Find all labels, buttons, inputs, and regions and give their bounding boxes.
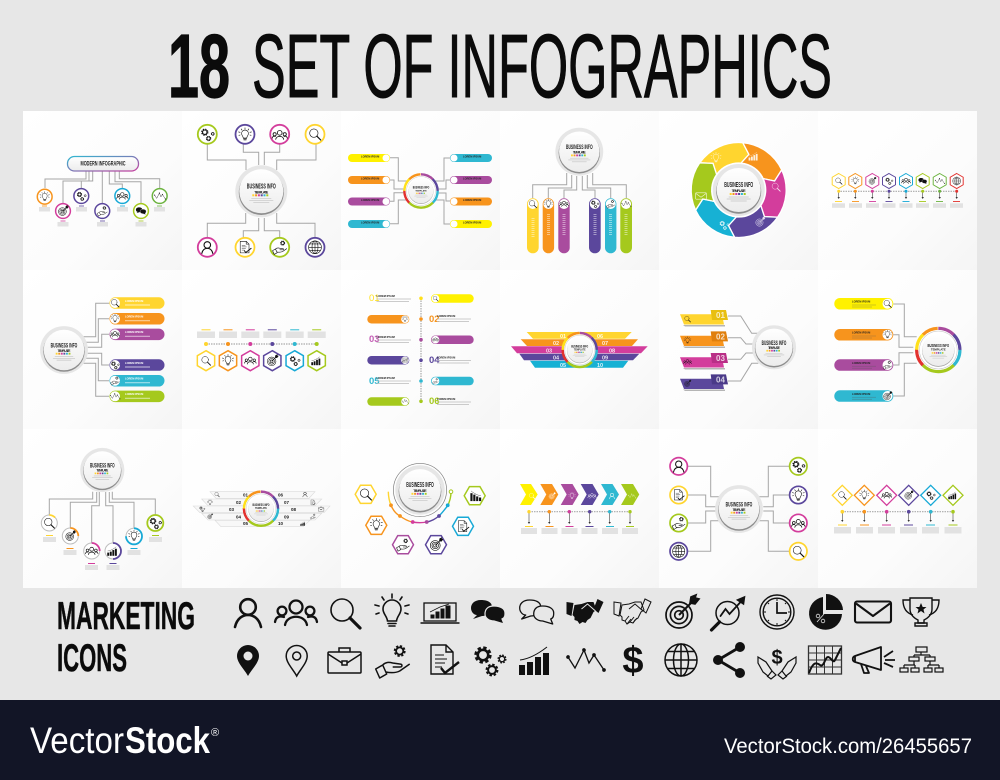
- center circle: BUSINESS INFO: [406, 482, 434, 489]
- panel 14: white layered ribbons with ring: 09: [284, 514, 290, 520]
- panel 3: ring with eight pills: LOREM IPSUM: [361, 198, 379, 202]
- panel 7: center left with six bars: LOREM IPSUM: [125, 315, 143, 319]
- panel backgrounds grid: [23, 111, 977, 588]
- panel 10: layered ribbons with ring: 04: [553, 355, 560, 361]
- panel 14: white layered ribbons with ring: 05: [243, 521, 249, 526]
- panel 9: vertical timeline: LOREM IPSUM: [437, 356, 455, 360]
- panel 3: ring with eight pills: LOREM IPSUM: [361, 220, 379, 224]
- center circle: TEMPLATE: [732, 189, 746, 193]
- panel 3: ring with eight pills: LOREM IPSUM: [463, 176, 481, 180]
- panel 14: white layered ribbons with ring: 03: [229, 507, 235, 512]
- center ring: TEMPLATE: [574, 348, 586, 351]
- panel 12: pills with ring right: LOREM IPSUM: [852, 361, 870, 365]
- panel 3: ring with eight pills: LOREM IPSUM: [463, 198, 481, 202]
- center ring: [563, 333, 597, 367]
- panel 14: white layered ribbons with ring: 07: [284, 500, 290, 505]
- panel 8: hexagon row: [197, 329, 326, 371]
- panel 9: vertical timeline: LOREM IPSUM: [376, 335, 395, 339]
- panel 3: ring with eight pills: LOREM IPSUM: [463, 154, 481, 158]
- center ring: [244, 492, 278, 526]
- panel 11: numbered ribbons: 01: [716, 311, 725, 320]
- panel 14: white layered ribbons with ring: 02: [236, 500, 242, 505]
- title: [168, 17, 832, 117]
- center circle: TEMPLATE: [96, 469, 109, 473]
- center circle: [715, 485, 763, 533]
- panel 10: layered ribbons with ring: 08: [609, 348, 615, 354]
- title: 18: [168, 17, 230, 117]
- panel 9: vertical timeline: 05: [369, 376, 380, 387]
- panel 14: white layered ribbons with ring: 08: [291, 507, 297, 512]
- panel 2: radial business info: [198, 125, 324, 257]
- colored arc: [388, 492, 451, 523]
- marketing icons heading: MARKETING: [57, 595, 195, 638]
- panel 16: chevrons timeline: [520, 484, 639, 534]
- footer logo: ®: [211, 727, 219, 739]
- center circle: TEMPLATE: [254, 190, 269, 194]
- segment green: [691, 163, 717, 210]
- center circle: TEMPLATE: [573, 151, 586, 155]
- panel 14: white layered ribbons with ring: 06: [278, 492, 284, 498]
- center ring: BUSINESS INFO: [253, 502, 269, 507]
- panel 1: modern infographic tree: [37, 156, 167, 226]
- panel 9: vertical timeline: LOREM IPSUM: [437, 397, 455, 401]
- panel 3: ring with eight pills: [348, 154, 492, 228]
- center circle: TEMPLATE: [413, 489, 427, 493]
- heading pill: MODERN INFOGRAPHIC: [80, 162, 126, 168]
- panel 18: diamond timeline: [832, 485, 963, 534]
- panel 12: pills with ring right: LOREM IPSUM: [852, 392, 870, 396]
- center ring: [917, 328, 960, 372]
- panel 3: ring with eight pills: LOREM IPSUM: [463, 220, 481, 224]
- center circle: [555, 128, 603, 176]
- panel 7: center left with six bars: LOREM IPSUM: [125, 361, 143, 365]
- panel 9: vertical timeline: 04: [429, 355, 440, 366]
- panel 9: vertical timeline: LOREM IPSUM: [437, 314, 455, 318]
- center circle: BUSINESS INFO: [90, 462, 115, 469]
- center circle: [393, 463, 447, 517]
- center ring: BUSINESS INFO: [571, 343, 588, 348]
- panel 13: circles with partial arcs: [41, 448, 163, 570]
- center circle: [713, 164, 765, 216]
- panel 9: vertical timeline: LOREM IPSUM: [376, 376, 395, 380]
- panel 7: center left with six bars: LOREM IPSUM: [125, 299, 143, 303]
- icon row 1: [235, 594, 939, 630]
- center circle: TEMPLATE: [58, 349, 71, 353]
- panel 12: pills with ring right: LOREM IPSUM: [852, 330, 870, 334]
- center circle: BUSINESS INFO: [51, 342, 77, 349]
- footer bar: [0, 700, 1000, 780]
- panel 10: layered ribbons with ring: 01: [560, 334, 566, 340]
- panel 11: numbered ribbons: 03: [716, 354, 725, 363]
- panel 3: ring with eight pills: LOREM IPSUM: [361, 176, 379, 180]
- panel 10: layered ribbons with ring: 03: [546, 348, 552, 354]
- center circle: BUSINESS INFO: [724, 180, 753, 189]
- center circle: [752, 325, 796, 369]
- center circle: BUSINESS INFO: [247, 181, 276, 190]
- panel 10: layered ribbons with ring: 02: [553, 341, 559, 347]
- panel 3: ring with eight pills: LOREM IPSUM: [361, 154, 379, 158]
- center ring: TEMPLATE: [415, 189, 427, 192]
- panel 7: center left with six bars: LOREM IPSUM: [125, 377, 143, 381]
- panel 10: layered ribbons with ring: 06: [597, 334, 603, 340]
- footer logo: Vector: [30, 720, 124, 761]
- center ring: [404, 174, 438, 208]
- segment orange: [741, 143, 782, 181]
- panel 12: pills with ring right: LOREM IPSUM: [852, 300, 870, 304]
- marketing icons heading: [57, 595, 195, 680]
- panel 7: center left with six bars: [40, 297, 164, 402]
- segment pink: [761, 170, 786, 217]
- center ring: BUSINESS INFO: [413, 186, 429, 190]
- panel 17: center with side circles: [670, 458, 807, 560]
- center circle: TEMPLATE: [768, 346, 781, 350]
- icon row 2: [237, 640, 943, 682]
- icon row 2: $: [622, 640, 644, 682]
- panel 15: arc with hexagons: [353, 463, 488, 558]
- segment yellow: [700, 143, 749, 174]
- panel 10: layered ribbons with ring: 07: [602, 341, 608, 347]
- center circle: BUSINESS INFO: [762, 340, 786, 347]
- panel 10: layered ribbons with ring: 09: [602, 355, 608, 361]
- center circle: BUSINESS INFO: [726, 501, 752, 508]
- center ring: BUSINESS INFO: [927, 343, 949, 349]
- panel 14: white layered ribbons with ring: 10: [278, 521, 284, 526]
- footer logo: Stock: [125, 720, 210, 761]
- panel 9: vertical timeline: LOREM IPSUM: [376, 294, 395, 298]
- panel 9: vertical timeline: 02: [429, 314, 440, 325]
- panel 12: pills with ring right: [834, 298, 960, 402]
- center ring: TEMPLATE: [931, 348, 946, 352]
- panel 7: center left with six bars: LOREM IPSUM: [125, 330, 143, 334]
- panel 9: vertical timeline: 03: [369, 334, 380, 345]
- footer url: VectorStock.com/26455657: [724, 735, 972, 758]
- panel 14: white layered ribbons with ring: 01: [243, 492, 249, 498]
- segment dark purple: [728, 206, 778, 237]
- center circle: [40, 326, 88, 374]
- center circle: [235, 165, 287, 217]
- panel 7: center left with six bars: LOREM IPSUM: [125, 392, 143, 396]
- panel 10: layered ribbons with ring: 10: [597, 363, 603, 369]
- marketing icons heading: ICONS: [57, 637, 127, 680]
- panel 6: hexagon timeline: [832, 174, 963, 208]
- panel 11: numbered ribbons: [680, 310, 796, 391]
- panel 9: vertical timeline: 01: [369, 293, 380, 304]
- icon row 2: $: [771, 647, 783, 669]
- segment teal: [696, 199, 736, 237]
- panel 11: numbered ribbons: 02: [716, 332, 725, 341]
- panel 14: white layered ribbons with ring: 04: [236, 514, 242, 520]
- footer logo: [30, 720, 219, 761]
- center circle: TEMPLATE: [733, 508, 746, 512]
- center circle: [80, 448, 124, 492]
- panel 10: layered ribbons with ring: [511, 332, 648, 369]
- panel 10: layered ribbons with ring: 05: [560, 363, 566, 369]
- panel 11: numbered ribbons: 04: [716, 375, 725, 384]
- center circle: BUSINESS INFO: [566, 144, 593, 151]
- panel 9: vertical timeline: [367, 293, 474, 407]
- panel 9: vertical timeline: 06: [429, 396, 440, 407]
- panel 14: white layered ribbons with ring: [193, 492, 330, 527]
- panel 4: six vertical bars: [527, 128, 632, 253]
- center ring: TEMPLATE: [255, 507, 267, 510]
- panel 5: circular arrows: [691, 143, 786, 237]
